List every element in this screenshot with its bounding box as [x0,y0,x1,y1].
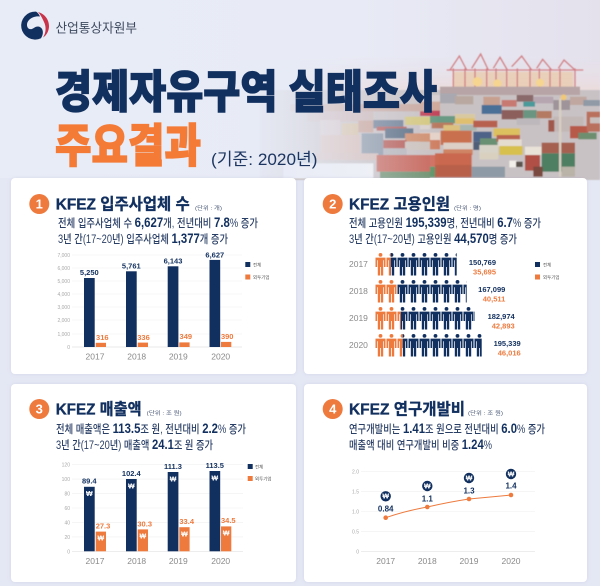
panel 2 legend: 전체 [543,262,551,268]
line chart: R&D spending: ₩ [508,471,515,478]
bar chart: tenant companies: 0 [67,345,70,351]
bar chart: tenant companies: 336 [137,333,150,342]
bar chart: tenant companies: 7,000 [57,253,70,259]
line chart: R&D spending: 0.5 [352,529,359,535]
line chart: R&D spending: 1.1 [422,494,433,503]
bar chart: tenant companies [57,250,242,362]
pictogram chart: employment by year: 150,769 [469,258,496,267]
panel 4 summary [349,420,545,452]
bar chart: sales: 120 [62,463,70,469]
pictogram chart: employment by year: 167,099 [478,285,505,294]
panel 4 unit: (단위 : 조 원) [468,409,503,417]
panel 1 legend [245,262,270,281]
line chart: R&D spending: 2018 [418,556,437,566]
bar chart: tenant companies: 6,143 [164,256,182,266]
bar chart: sales: ₩ [139,534,146,540]
bar chart: sales: 80 [64,492,70,498]
far part of the port, coordinates from crop at 3x [420,54,600,177]
faded part of the port, coordinates from crop at 3x [283,104,430,178]
bar chart: tenant companies: 4,000 [57,292,70,298]
pictogram chart: employment by year: 2020 [349,340,368,350]
line chart: R&D spending: 1.0 [352,510,359,516]
panel 4 number badge: 4 [329,402,337,417]
bar chart: tenant companies: 5,761 [122,262,141,270]
line chart: R&D spending: 0.84 [378,504,394,513]
pictogram chart: employment by year: 46,016 [498,348,521,358]
row 2018 [375,280,467,304]
panel 1 unit: (단위 : 개) [195,204,222,212]
bar chart: tenant companies: 349 [180,332,192,341]
panel 2 summary: 3년 간(17~20년) 고용인원 44,570명 증가 [349,230,517,246]
bar chart: sales: ₩ [97,536,104,542]
panel 2 summary: 전체 고용인원 195,339명, 전년대비 6.7% 증가 [349,214,541,230]
panel 1 number badge [29,194,49,214]
line chart: R&D spending: ₩ [466,475,473,482]
panel 3 heading: KFEZ 매출액 [56,401,142,419]
row 2017 [375,253,457,277]
line chart: R&D spending: 2019 [460,556,479,566]
line chart: R&D spending: 1.3 [463,486,475,495]
bar chart: tenant companies: 1,000 [57,332,70,338]
panel 2: KFEZ employment [304,178,587,374]
panel 2 unit: (단위 : 명) [454,204,481,212]
panel 3 summary: 전체 매출액은 113.5조 원, 전년대비 2.2% 증가 [56,420,246,436]
pictogram chart: employment by year [349,253,521,358]
panel 4 summary: 매출액 대비 연구개발비 비중 1.24% [349,436,492,452]
pictogram chart: employment by year: 2019 [349,313,368,323]
panel 1 heading: KFEZ 입주사업체 수 [56,196,190,214]
logo text: ministry name: 산업통상자원부 [56,20,137,36]
panel 3: KFEZ sales [11,384,296,582]
bar chart: sales: ₩ [170,476,177,484]
pictogram chart: employment by year: 2018 [349,286,368,296]
bar chart: tenant companies: 2019 [169,352,188,362]
bar chart: sales: 102.4 [122,469,142,478]
logo: government emblem [21,12,49,40]
bar chart: tenant companies: 316 [96,333,109,342]
bar chart: tenant companies: 5,250 [80,268,99,277]
panel 3 legend [248,464,272,482]
line chart: R&D spending: ₩ [382,494,389,501]
panel 1 legend: 전체 [253,262,261,268]
panel 1 number badge: 1 [36,197,43,212]
bar chart: tenant companies: 3,000 [57,305,70,311]
bar chart: sales: 100 [62,477,70,483]
bar chart: sales: 30.3 [137,520,152,528]
panel 3 legend: 외투기업 [255,476,272,482]
bar chart: sales: ₩ [181,532,188,538]
bar chart: sales: 113.5 [206,461,224,470]
bar chart: sales: 2018 [127,556,146,566]
bar chart: sales: 60 [64,506,70,512]
pictogram chart: employment by year: 182,974 [488,312,516,321]
bar chart: tenant companies: 6,000 [57,266,70,272]
line chart: R&D spending [352,469,535,566]
bar chart: sales: 89.4 [82,476,97,486]
pictogram chart: employment by year: 40,511 [483,294,505,304]
panel 2 number badge [323,194,343,214]
panel 2 legend: 외투기업 [543,274,560,281]
panel 3 summary [56,420,246,452]
panel 3 legend: 전체 [255,464,263,470]
panel 4: KFEZ R&D spending [304,384,587,582]
panel 3 number badge: 3 [36,402,43,417]
panel 1 summary [58,214,258,246]
bar chart: tenant companies: 2020 [211,352,230,362]
bar chart: sales: ₩ [86,491,93,498]
panel 3 number badge [29,399,49,419]
pictogram chart: employment by year: 195,339 [494,339,521,348]
title: line one: 경제자유구역 실태조사 [55,56,437,120]
panel 1: KFEZ tenant companies [11,178,296,374]
panel 1 legend: 외투기업 [253,274,270,281]
pictogram chart: employment by year: 42,893 [492,322,515,330]
line chart: R&D spending: 1.4 [505,482,517,491]
panel 4 heading: KFEZ 연구개발비 [349,401,465,419]
row 2020 [375,334,482,358]
panel 3 unit: (단위 : 조 원) [147,409,182,417]
bar chart: tenant companies: 5,000 [57,279,70,285]
bar chart: tenant companies: 2,000 [57,318,70,324]
bar chart: tenant companies: 2018 [127,352,146,362]
pictogram chart: employment by year: 35,695 [473,268,496,276]
panel 2 legend [535,262,560,281]
bar chart: sales: 20 [64,535,70,541]
bar chart: tenant companies: 2017 [86,352,105,362]
bar chart: sales: 2019 [169,556,188,566]
bar chart: sales: 2020 [211,556,230,566]
line chart: R&D spending: 1.5 [352,490,359,496]
line chart: R&D spending: 2.0 [352,470,359,476]
line chart: R&D spending: ₩ [424,483,431,490]
bar chart: sales: 33.4 [179,517,195,526]
panel 3 summary: 3년 간(17~20년) 매출액 24.1조 원 증가 [56,436,213,452]
panel 1 summary: 3년 간(17~20년) 입주사업체 1,377개 증가 [58,230,228,246]
bar chart: tenant companies: 6,627 [205,250,224,260]
background photo: left fade overlay [240,60,440,178]
bar chart: sales: 0 [67,549,70,555]
bar chart: sales: ₩ [128,484,135,490]
line chart: R&D spending: 2020 [502,556,521,566]
title: line two: 주요결과 [55,110,201,176]
bar chart: tenant companies: 390 [221,332,233,341]
bar chart: sales: 111.3 [164,462,182,471]
bar chart: sales: ₩ [211,476,218,482]
pictogram chart: employment by year: 2017 [349,259,368,269]
bar chart: sales: ₩ [223,530,230,538]
background photo: container port [260,54,600,180]
panel 4 number badge [323,399,343,419]
panel 2 heading: KFEZ 고용인원 [349,196,450,214]
panel 1 summary: 전체 입주사업체 수 6,627개, 전년대비 7.8% 증가 [58,214,258,230]
bar chart: sales: 40 [64,520,70,526]
bar chart: sales [62,461,243,566]
background: sky [0,0,600,178]
panel 2 number badge: 2 [329,197,336,212]
panel 4 summary: 연구개발비는 1.41조 원으로 전년대비 6.0% 증가 [349,420,545,436]
line chart: R&D spending: 2017 [376,556,395,566]
row 2019 [375,307,475,331]
bar chart: sales: 27.3 [96,522,110,531]
line chart: R&D spending: 0 [356,549,359,555]
subtitle: base year: (기준: 2020년) [211,150,318,169]
bar chart: sales: 2017 [86,556,105,566]
bar chart: sales: 34.5 [221,516,236,525]
panel 2 summary [349,214,541,246]
